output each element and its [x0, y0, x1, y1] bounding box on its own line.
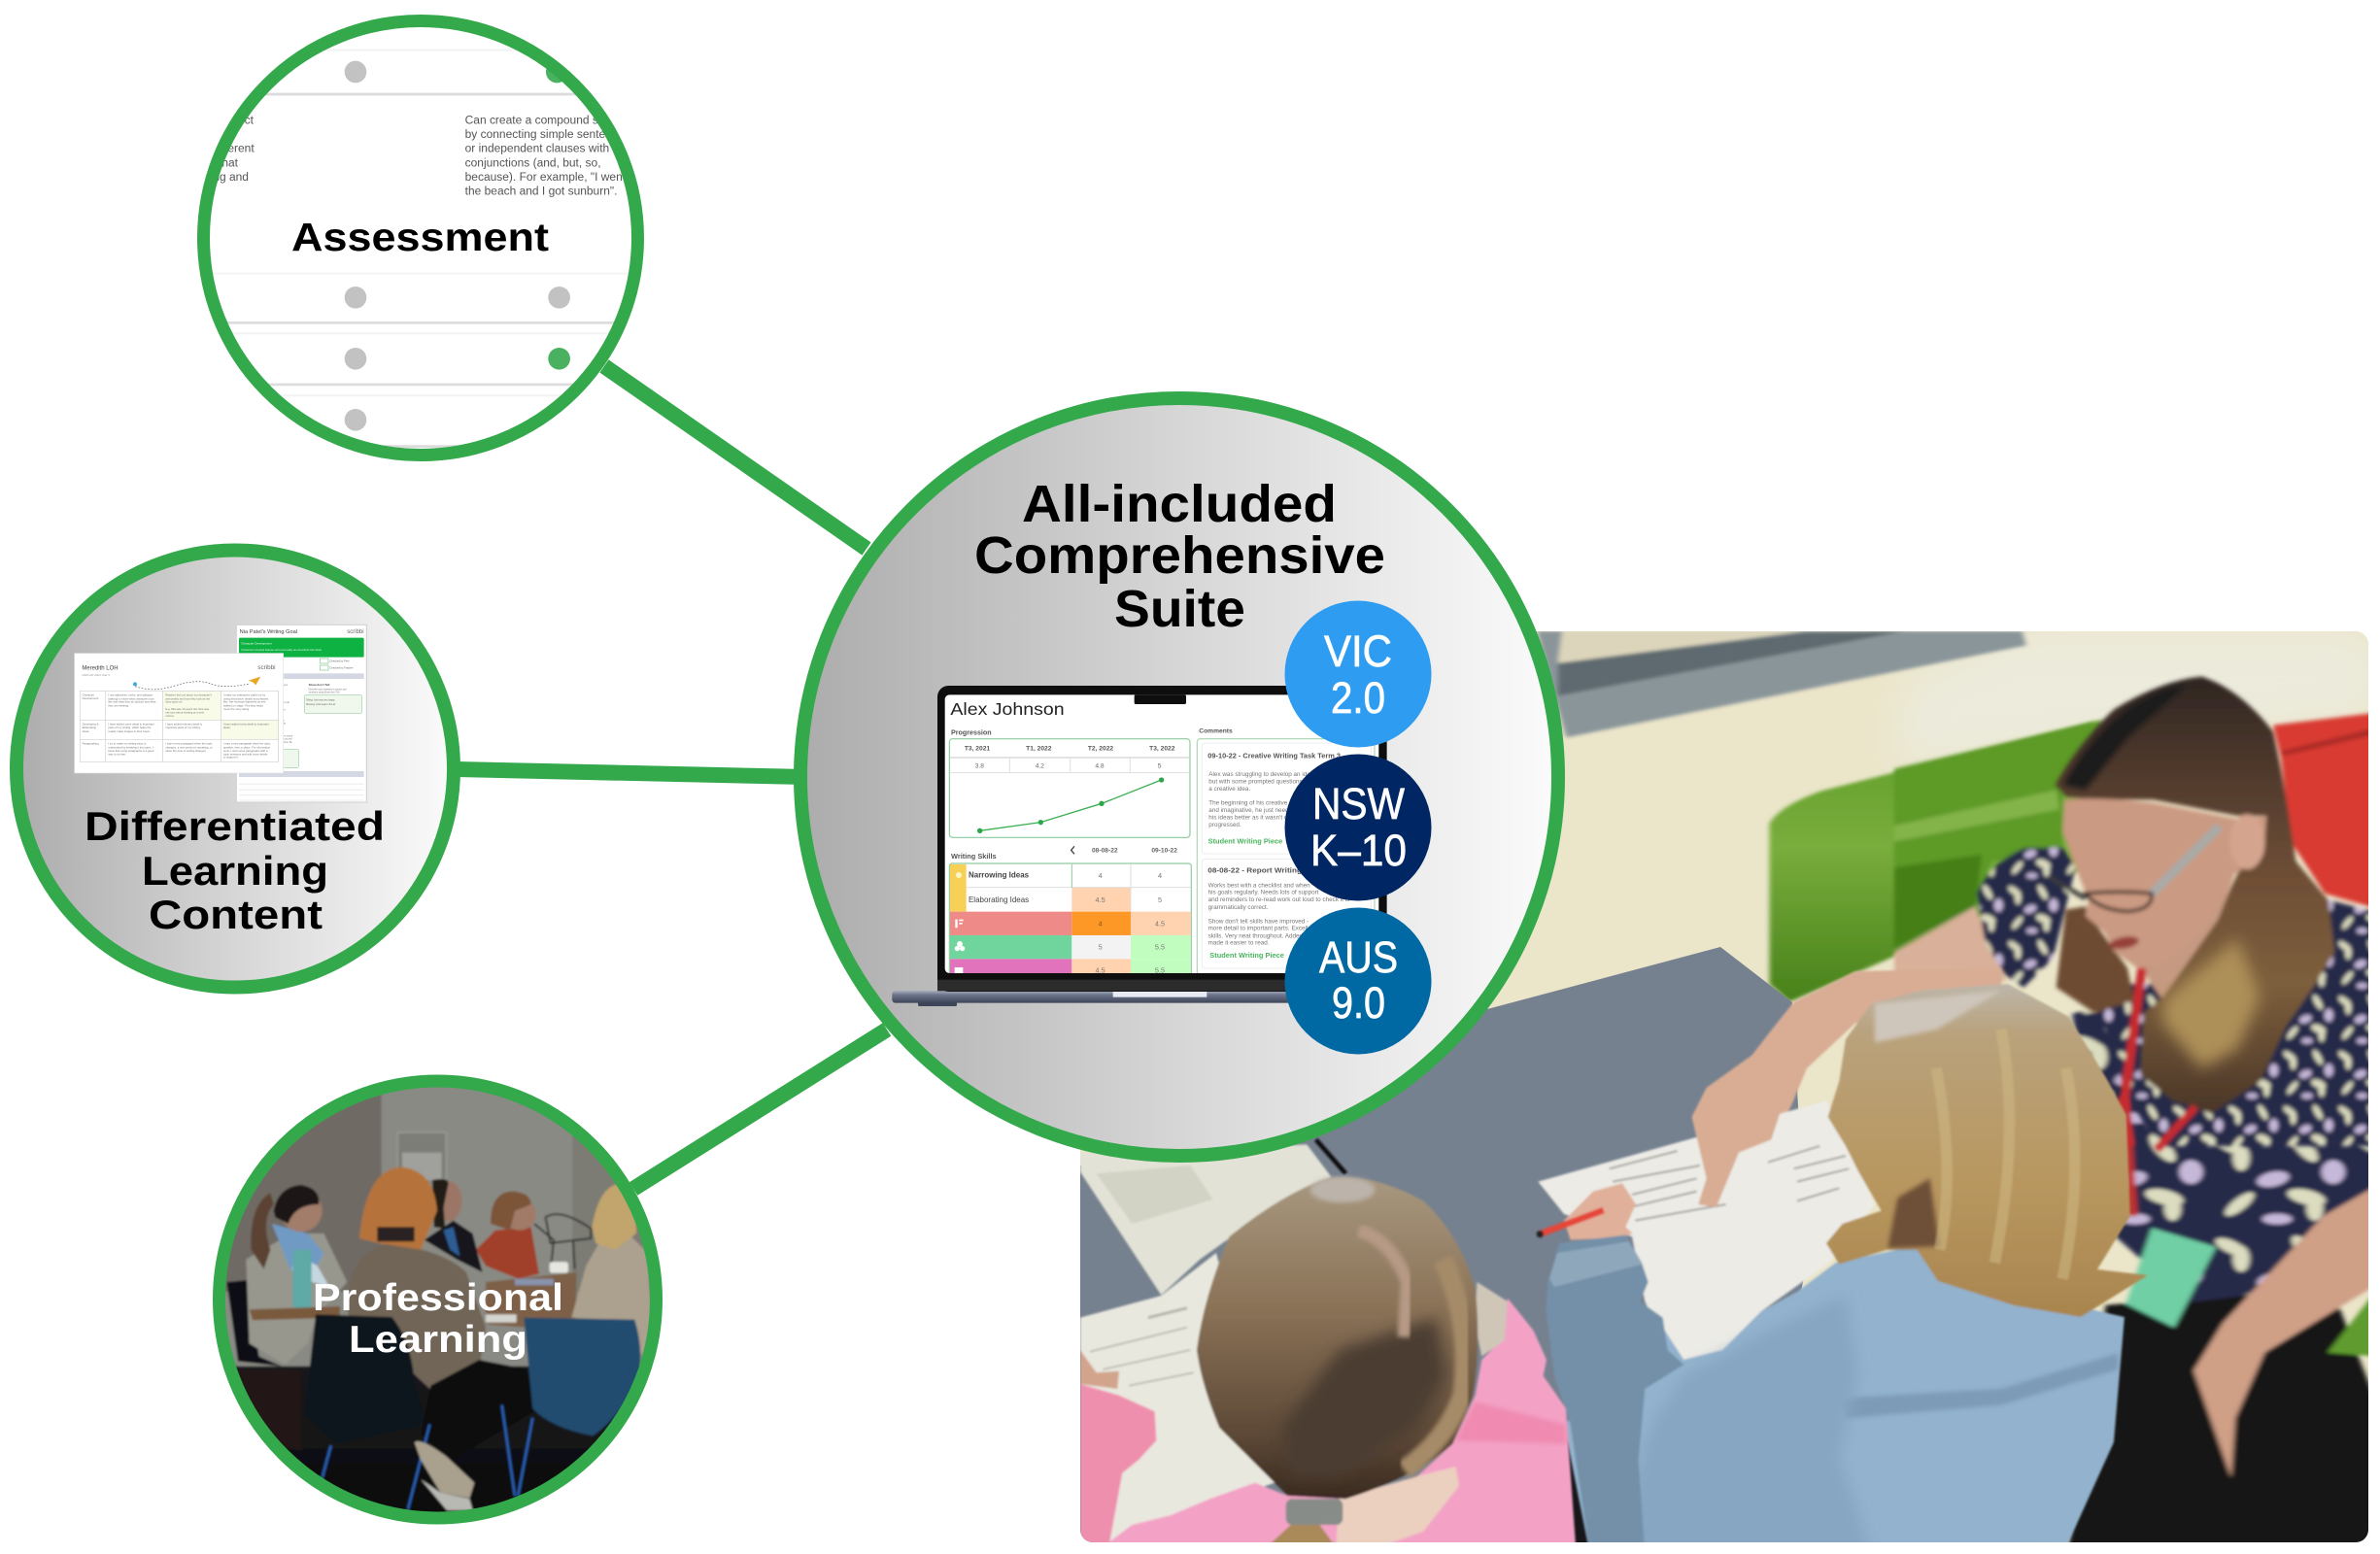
photo: teachers at a workshop	[194, 1059, 680, 1554]
back worksheet: writing goal: ve nouns	[284, 735, 293, 737]
table	[1080, 947, 1807, 1554]
writing skills table: Writing Skills	[951, 852, 997, 861]
progression chart: T3, 2021	[965, 746, 990, 753]
hair behind	[2057, 906, 2134, 1013]
front worksheet: rubric table: topic sentence and add more details	[223, 752, 268, 756]
heading: all-included comprehensive suite: All-included	[1022, 475, 1337, 533]
hair tie bead necklace	[1476, 1282, 1508, 1357]
rubric descriptor text: or independent clauses with	[465, 142, 609, 155]
front worksheet: rubric table: story goes on.	[165, 700, 183, 704]
worksheets screenshot	[75, 625, 366, 802]
heading: all-included comprehensive suite: Comprehensive	[974, 526, 1385, 585]
teacher other arm	[2193, 1168, 2380, 1477]
comments panel: Student Writing Piece	[1208, 837, 1282, 846]
writing skills table: Elaborating Ideas	[969, 895, 1029, 904]
scrunchie	[1286, 1499, 1343, 1525]
writing skills table: 5.5	[1155, 943, 1165, 952]
student name: Alex Johnson	[950, 699, 1065, 719]
blouse sleeve	[1977, 848, 2076, 988]
back worksheet: writing goal	[236, 625, 366, 802]
front worksheet: rubric table: I use adjectives, verbs, and dialogue	[108, 693, 153, 697]
progression chart: T1, 2022	[1026, 746, 1052, 753]
front worksheet: rubric table: I have added extra detail to important	[223, 723, 269, 726]
comments panel: more detail to important parts. Excellent	[1208, 926, 1316, 932]
mouth	[2109, 934, 2140, 951]
back worksheet: writing goal: Characters' physical features and personality are described with detail.	[241, 648, 323, 652]
student hair	[1826, 984, 2148, 1317]
comments panel: but with some prompted questions found	[1208, 778, 1320, 785]
left chair	[226, 1280, 282, 1367]
comments panel: a creative idea.	[1208, 786, 1250, 793]
badge: VIC 2.0: VIC	[1324, 626, 1392, 676]
badge: VIC 2.0	[1284, 600, 1432, 748]
rubric descriptor text	[191, 113, 640, 198]
child hair	[1197, 1177, 1478, 1499]
badge: VIC 2.0: 2.0	[1331, 673, 1385, 723]
front worksheet: rubric table: move the story along.	[223, 707, 250, 711]
lanyard	[2123, 968, 2195, 1149]
front worksheet: rubric table: understand by breaking it into parts. I	[108, 745, 153, 749]
dark hair under	[1887, 1178, 1940, 1248]
panel: assessment circle	[175, 21, 680, 455]
front worksheet: rubric table: Meredith LOH	[82, 665, 119, 671]
denim back	[1564, 1246, 2125, 1554]
front worksheet: rubric table: I try to make my writing easy to	[108, 742, 147, 746]
rubric descriptor text: different	[213, 142, 255, 155]
writing skills table: 4	[1099, 871, 1103, 880]
finger and hand	[1696, 1113, 1781, 1208]
front worksheet: rubric table: Paragraphing	[83, 742, 99, 746]
back worksheet: writing goal: Describe your character's actions and	[309, 688, 347, 691]
writing skills table: 08-08-22	[1092, 848, 1118, 855]
rubric descriptor text: the beach and I got sunburn".	[465, 185, 617, 198]
progression chart	[949, 727, 1190, 837]
connector: assessment	[604, 366, 867, 549]
shoes	[415, 1441, 474, 1499]
back worksheet: writing goal: e it all	[284, 701, 289, 704]
woman with ponytail	[246, 1233, 347, 1365]
walls	[194, 1059, 680, 1554]
front worksheet: rubric table: Developing &	[83, 723, 99, 726]
comments panel	[1197, 728, 1375, 975]
comments panel: grammatically correct.	[1208, 904, 1269, 911]
woman in navy	[425, 1221, 483, 1272]
cup	[550, 1262, 568, 1273]
comments panel: his ideas better as it wasn't clear	[1208, 814, 1298, 821]
assessment rubric screenshot	[175, 51, 680, 447]
window frame	[1537, 631, 2026, 737]
neck	[1336, 1467, 1459, 1544]
trousers	[421, 1360, 534, 1460]
face	[2062, 798, 2266, 968]
writing skills table: 4.5	[1096, 895, 1105, 904]
back worksheet: writing goal: Checked by Peer	[329, 659, 350, 663]
teacher trousers	[2064, 1287, 2380, 1554]
back worksheet: writing goal: tions. Be	[284, 741, 292, 744]
front worksheet: rubric table: Readers find out about my character's	[165, 693, 213, 697]
photo background layer	[1069, 622, 2380, 1554]
hand	[1080, 1350, 1119, 1389]
connector: differentiated learning content	[457, 769, 806, 777]
rubric descriptor text: writing and	[191, 170, 249, 184]
comments panel: Show don't tell skills have improved -	[1208, 918, 1309, 925]
hoodie	[1106, 1299, 1576, 1544]
front worksheet: rubric table: texts, I start some paragraphs with a	[223, 749, 268, 753]
front worksheet: rubric table: school.	[165, 714, 174, 718]
panel: differentiated learning content circle	[17, 550, 454, 987]
front worksheet: rubric table: when the time or setting changes.	[165, 749, 207, 753]
laptop base	[892, 991, 1426, 1006]
writing skills table: 4.5	[1096, 965, 1105, 974]
heading: all-included comprehensive suite	[974, 475, 1385, 638]
rubric descriptor text: that	[219, 155, 239, 169]
front worksheet: rubric table: scribbi	[257, 664, 276, 671]
floor	[194, 1367, 680, 1554]
front worksheet: rubric table: know that using paragraphs is a good	[108, 749, 154, 753]
chair legs	[323, 1405, 532, 1509]
teacher forearm and hand	[1692, 968, 2001, 1207]
handwriting	[1090, 1308, 1194, 1386]
green bench bottom	[2324, 1296, 2368, 1359]
writing skills table: Narrowing Ideas	[969, 871, 1030, 880]
back worksheet: writing goal: Showing: Josh leapt in the air	[306, 703, 336, 706]
front worksheet: rubric table: like: Her stomach tightened as she	[223, 700, 266, 704]
pink sleeve	[1080, 1384, 1156, 1544]
badge: AUS 9.0	[1284, 907, 1432, 1055]
comments panel: and imaginative, he just needs to	[1208, 807, 1299, 814]
dark chair	[304, 1314, 427, 1444]
wire chairs	[534, 1214, 591, 1272]
hair	[2055, 677, 2334, 1114]
writing skills table: 5	[1158, 895, 1162, 904]
front worksheet: rubric table: walked on stage. This also helps	[223, 703, 263, 707]
badge: NSW K-10: K–10	[1310, 826, 1407, 875]
writing skills table: 4	[1158, 871, 1162, 880]
panel: main comprehensive suite circle	[800, 398, 1558, 1156]
ponytail	[1267, 1525, 1336, 1547]
heading: professional learning	[313, 1277, 563, 1361]
ear	[2229, 814, 2265, 869]
front worksheet: rubric table: I start a new paragraph when the topic	[165, 742, 213, 746]
front worksheet: rubric table: like and what they do (action) and what	[108, 700, 156, 704]
heading: differentiated learning content: Learning	[142, 848, 328, 894]
back worksheet: writing goal: y do and	[284, 739, 292, 741]
rating dots	[345, 61, 570, 431]
right rim	[1404, 1260, 1465, 1470]
woman in red	[476, 1227, 539, 1279]
heading: assessment: Assessment	[291, 215, 549, 259]
comments panel: Alex was struggling to develop an idea	[1208, 771, 1314, 778]
panel: professional learning circle	[194, 1059, 680, 1554]
teacher arm upper	[1894, 906, 2006, 997]
woman in beige	[571, 1233, 654, 1367]
front worksheet: rubric table: important parts of my writing.	[165, 726, 201, 729]
back worksheet: writing goal: s	[284, 721, 286, 723]
comments panel: The beginning of his creative story	[1208, 800, 1304, 807]
blue chair	[524, 1318, 640, 1436]
denim sleeve	[1547, 1235, 1683, 1554]
writing skills table: 4.5	[1155, 919, 1165, 928]
front worksheet: rubric table: changes, a new person is speaking, or	[165, 745, 213, 749]
back worksheet: writing goal: d?	[284, 724, 287, 726]
dark patch	[1281, 1318, 1446, 1476]
second paper	[1080, 1253, 1275, 1544]
front worksheet: rubric table: way to do that.	[108, 752, 126, 756]
comments panel: Student Writing Piece	[1209, 951, 1284, 960]
parting	[1359, 1231, 1408, 1337]
comments panel: his goals regularly. Needs lots of support	[1208, 890, 1319, 896]
teacher blouse lower	[2068, 1009, 2368, 1304]
progression chart: 3.8	[975, 763, 984, 770]
writing skills table: 5.5	[1155, 965, 1165, 974]
front child	[1080, 1139, 1576, 1547]
progression chart: 4.8	[1095, 763, 1105, 770]
front worksheet: rubric table: (talking) to show what characters look	[108, 696, 154, 700]
front worksheet: rubric table: Character	[83, 693, 94, 697]
front worksheet: rubric table: NAPLAN 2023 Year 5	[82, 673, 110, 677]
heading: differentiated learning content	[85, 803, 385, 937]
handwriting	[1610, 1146, 1849, 1221]
back worksheet: writing goal: emotions using Show don't Tell	[309, 691, 340, 693]
comments panel: skills. Very neat throughout. Added	[1208, 932, 1304, 939]
progression chart: T3, 2022	[1149, 746, 1175, 753]
front worksheet: rubric table: they are thinking.	[108, 703, 129, 707]
woman from behind with orange hair	[348, 1243, 486, 1402]
comments panel: Comments	[1199, 728, 1233, 735]
ID card	[2125, 1228, 2216, 1328]
writing skills table: 4	[1099, 919, 1103, 928]
blonde highlight	[2163, 939, 2261, 1068]
comments panel: and reminders to re-read work out loud to check it is	[1208, 896, 1349, 903]
front worksheet: rubric table: speaker, time or place. For information	[223, 745, 271, 749]
front worksheet: rubric table: E.g. Mia was 10 years old. She was	[165, 707, 210, 711]
heading: professional learning: Professional	[313, 1277, 563, 1319]
blouse body	[2089, 900, 2380, 1146]
front worksheet: rubric table: nervous about starting at a new	[165, 710, 205, 714]
neck	[2140, 894, 2237, 1000]
highlights	[1936, 1030, 2075, 1279]
rubric descriptor text: because). For example, "I went to	[465, 170, 639, 184]
rubric descriptor text: Can create a compound sentence	[465, 113, 640, 126]
front worksheet: rubric table: parts of my writing, which helps the	[108, 726, 152, 729]
heading: professional learning: Learning	[349, 1319, 527, 1361]
comments panel: Works best with a checklist and when	[1208, 883, 1310, 890]
progression chart: Progression	[951, 727, 992, 736]
dark crown	[2062, 686, 2186, 790]
worksheet	[1080, 1144, 1331, 1295]
comments panel: 09-10-22 - Creative Writing Task Term 3	[1207, 753, 1341, 760]
black pen	[1316, 1139, 1345, 1173]
back worksheet: writing goal: Telling: Josh was very happy	[306, 699, 335, 702]
rubric descriptor text: conjunctions (and, but, so,	[465, 155, 601, 169]
back worksheet: writing goal: your	[284, 684, 288, 687]
comments panel: made it easier to read.	[1208, 940, 1270, 947]
badge: AUS 9.0: AUS	[1319, 932, 1398, 982]
laptop lid	[937, 686, 1387, 992]
front worksheet: rubric table: I make my characters stand out by	[223, 693, 266, 697]
back worksheet: writing goal: Nia Patel's Writing Goal	[240, 629, 297, 635]
badge: AUS 9.0: 9.0	[1332, 978, 1385, 1028]
progression chart: T2, 2022	[1088, 746, 1113, 753]
back worksheet: writing goal: er	[284, 709, 286, 712]
photo: teacher with students	[1069, 622, 2380, 1554]
front worksheet: rubric table: to support it.	[223, 756, 239, 760]
writing skills table: 5	[1099, 943, 1103, 952]
water bottle	[292, 1250, 312, 1308]
lanyard	[2125, 1098, 2132, 1216]
writing skills table: 09-10-22	[1151, 848, 1177, 855]
badge: NSW K-10: NSW	[1312, 779, 1405, 828]
laptop with student dashboard	[892, 686, 1426, 1006]
table	[250, 1306, 340, 1320]
back worksheet: writing goal: scribbi	[347, 629, 364, 635]
rubric descriptor text: correct	[218, 113, 255, 126]
writing skills table	[949, 846, 1191, 975]
connector lines	[457, 366, 887, 1189]
front worksheet: rubric table: I have added relevant detail to	[165, 723, 203, 726]
student writing with teacher's hand	[1537, 968, 2148, 1554]
front worksheet: rubric table: I have added some detail to important	[108, 723, 154, 726]
front worksheet: rubric table: personality and how they look as the	[165, 696, 210, 700]
front worksheet: rubric table: using descriptive details and phrases	[223, 696, 269, 700]
rubric descriptor text: by connecting simple sentences	[465, 127, 630, 141]
wall right top	[1894, 631, 2380, 767]
water fountain	[397, 1132, 446, 1179]
progression chart: 4.2	[1036, 763, 1044, 770]
front worksheet: rubric table: Ideas	[83, 729, 89, 733]
front worksheet: rubric table	[75, 654, 284, 773]
heading: differentiated learning content: Content	[149, 892, 323, 937]
student hand	[1564, 1183, 1636, 1240]
dark gap under jacket	[1567, 1439, 1589, 1542]
heading: all-included comprehensive suite: Suite	[1114, 580, 1245, 638]
green seat	[1890, 719, 2096, 901]
front worksheet: rubric table: Development	[83, 696, 99, 700]
screen	[945, 694, 1378, 973]
connector: professional learning	[633, 1030, 887, 1189]
notebook	[1538, 1100, 1875, 1360]
grey crown	[1310, 1177, 1375, 1202]
back worksheet: writing goal: Character Development	[241, 642, 272, 646]
screen bottom bezel	[937, 973, 1387, 980]
progression chart: 5	[1158, 763, 1162, 770]
badge: NSW K-10	[1284, 754, 1432, 901]
comments panel: 08-08-22 - Report Writing	[1207, 868, 1302, 875]
teacher	[1894, 677, 2380, 1149]
front worksheet: rubric table: reader make images in their head.	[108, 729, 150, 733]
front worksheet: rubric table: Elaborating	[83, 726, 96, 729]
glasses	[2050, 827, 2220, 911]
back worksheet: writing goal: Show don't Tell	[309, 683, 330, 687]
red marker	[1542, 1210, 1604, 1233]
red seat	[2273, 712, 2380, 910]
front worksheet: rubric table: ideas.	[223, 726, 231, 729]
green bench	[1770, 720, 2101, 1002]
comments panel: progressed.	[1208, 822, 1241, 828]
back worksheet: writing goal: Checked by Teacher	[329, 665, 354, 669]
front worksheet: rubric table: I start a new paragraph when the topic,	[223, 742, 271, 746]
heading: differentiated learning content: Differentiated	[85, 803, 385, 849]
camera notch	[1135, 694, 1186, 704]
